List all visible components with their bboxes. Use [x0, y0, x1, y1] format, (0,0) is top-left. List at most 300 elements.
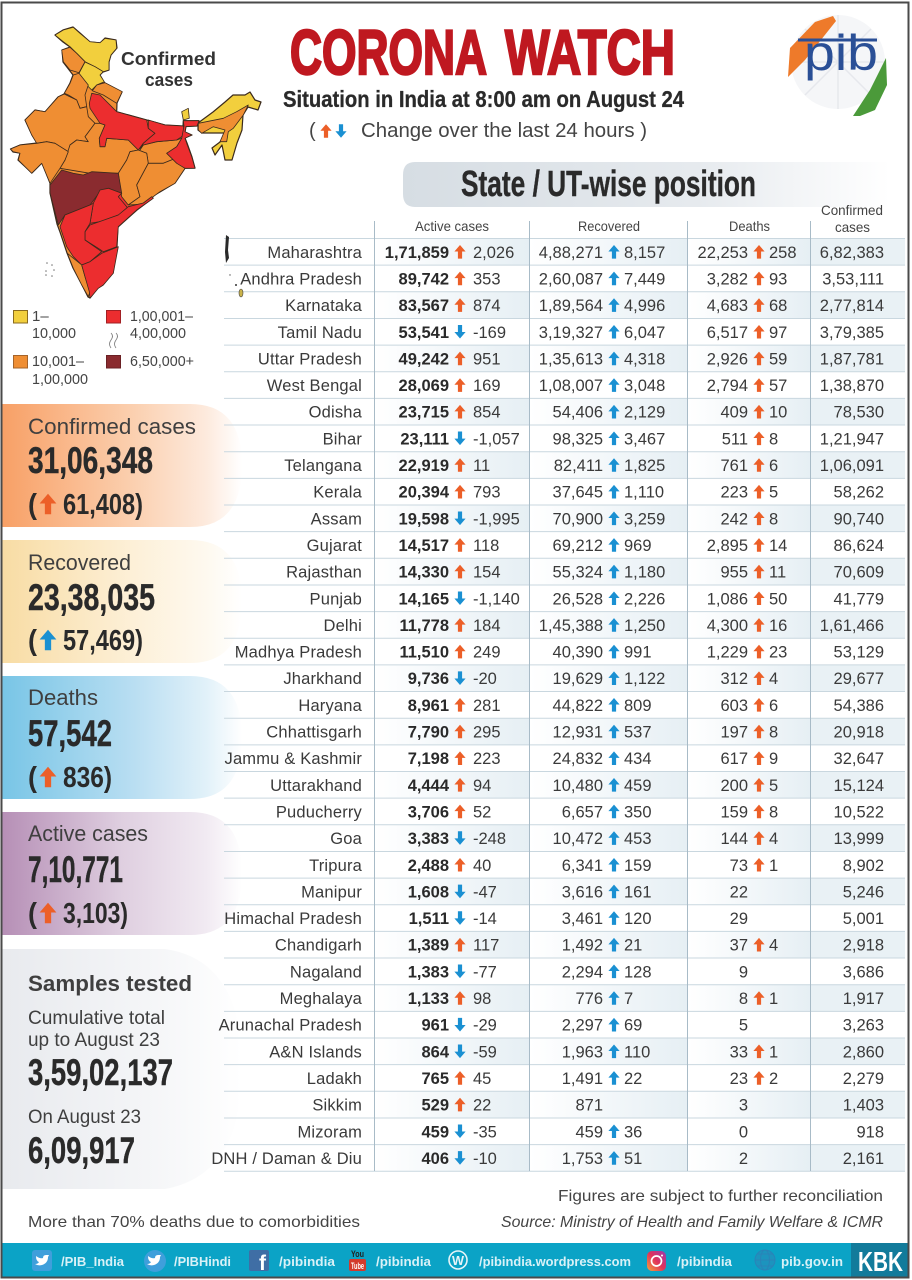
row: Jharkhand — [283, 665, 905, 692]
row: Puducherry — [276, 803, 884, 821]
map legend: 6,50,000+ — [130, 353, 194, 370]
row: Arunachal Pradesh: 3,263 — [843, 1017, 884, 1035]
row: West Bengal: West Bengal — [267, 377, 362, 395]
row: Tamil Nadu: 53,541 — [399, 324, 449, 342]
row: Ladakh: Ladakh — [307, 1070, 362, 1088]
row: Punjab — [310, 590, 884, 608]
row: Tamil Nadu: 97 — [769, 324, 787, 342]
row: Mizoram: -35 — [473, 1123, 497, 1141]
map legend: 1,00,000 — [32, 371, 88, 388]
row: A&N Islands: 1,963 — [562, 1043, 603, 1061]
row: Puducherry: 159 — [720, 803, 748, 821]
row: Chandigarh: 2,918 — [843, 937, 884, 955]
row: Andhra Pradesh: Andhra Pradesh — [240, 270, 362, 288]
row: Jharkhand: 1,122 — [624, 670, 665, 688]
row: Punjab: 14,165 — [399, 590, 449, 608]
footer text: pibindia: /pibindia — [279, 1254, 336, 1269]
map: Andaman and Nicobar islands — [225, 235, 243, 297]
row: Uttarakhand: 200 — [720, 777, 748, 795]
row: Odisha: 854 — [473, 404, 501, 422]
row: Sikkim: 3 — [739, 1097, 748, 1115]
row: Punjab: Punjab — [310, 590, 362, 608]
row: Odisha: 54,406 — [553, 404, 603, 422]
row: Uttar Pradesh: Uttar Pradesh — [258, 350, 362, 368]
row: Haryana — [298, 697, 884, 715]
row: Telangana: 1,825 — [624, 457, 665, 475]
map legend: 4,00,000 — [130, 325, 186, 342]
row: Gujarat: 969 — [624, 537, 652, 555]
row: Chhattisgarh: 7,790 — [408, 724, 449, 742]
row: Madhya Pradesh: 40,390 — [553, 644, 603, 662]
row: Punjab: 50 — [769, 590, 787, 608]
row: Ladakh: 22 — [624, 1070, 642, 1088]
row: DNH / Daman & Diu: 51 — [624, 1150, 642, 1168]
row: Punjab: 26,528 — [553, 590, 603, 608]
row: Meghalaya: 98 — [473, 990, 491, 1008]
row: Jharkhand: Jharkhand — [283, 670, 362, 688]
panel: active cases: 3,103) — [63, 898, 128, 930]
row: Delhi: 11,778 — [399, 617, 449, 635]
map legend — [14, 308, 194, 388]
row: Bihar: 23,111 — [400, 430, 449, 448]
row: Chandigarh: 1,492 — [562, 937, 603, 955]
row: Mizoram: Mizoram — [297, 1123, 362, 1141]
row: Goa: Goa — [330, 830, 363, 848]
map label — [121, 49, 216, 90]
subtitle: Situation in India at 8:00 am on August 24 — [283, 86, 684, 112]
table header: cases — [835, 219, 870, 235]
row: West Bengal: 1,38,870 — [820, 377, 884, 395]
row: Puducherry: Puducherry — [276, 803, 363, 821]
row: Mizoram — [297, 1123, 884, 1141]
logo: PIB — [788, 15, 887, 116]
row: Telangana: Telangana — [284, 457, 363, 475]
map legend: 10,001– — [32, 353, 85, 370]
row: Jharkhand: 9,736 — [408, 670, 449, 688]
row: Sikkim: Sikkim — [312, 1097, 362, 1115]
row: Sikkim: 871 — [575, 1097, 603, 1115]
row: Delhi: Delhi — [323, 617, 362, 635]
row: Nagaland: 2,294 — [562, 963, 603, 981]
row: A&N Islands: -59 — [473, 1043, 497, 1061]
row: Sikkim: 22 — [473, 1097, 491, 1115]
footer bar — [2, 1243, 908, 1277]
panel: active cases: Active cases — [28, 821, 148, 846]
row: Telangana: 11 — [473, 457, 490, 475]
row: Assam — [311, 505, 905, 532]
row: Haryana: 809 — [624, 697, 652, 715]
panel: recovered: 23,38,035 — [28, 577, 155, 618]
row: Bihar: 1,21,947 — [820, 430, 884, 448]
note: comorbidities: More than 70% deaths due to comorbidities — [28, 1214, 360, 1231]
row: Tripura: 2,488 — [408, 857, 449, 875]
heading: State / UT-wise position: State / UT-wise position — [461, 163, 756, 204]
row: Rajasthan: 955 — [720, 564, 748, 582]
map label: cases — [145, 70, 193, 90]
row: Himachal Pradesh: 29 — [730, 910, 748, 928]
row: Meghalaya: 8 — [739, 990, 748, 1008]
row: Gujarat: 69,212 — [553, 537, 603, 555]
row: DNH / Daman & Diu: -10 — [473, 1150, 497, 1168]
icon: twitter square — [32, 1250, 52, 1271]
row: Goa: 3,383 — [408, 830, 449, 848]
icon: youtube: You — [351, 1249, 364, 1259]
row: Himachal Pradesh: 3,461 — [562, 910, 603, 928]
row: Chhattisgarh: Chhattisgarh — [266, 724, 362, 742]
row: West Bengal: 169 — [473, 377, 501, 395]
footer text: website: pib.gov.in — [781, 1254, 843, 1269]
row: Karnataka: 4,683 — [707, 297, 748, 315]
title: CORONA — [290, 18, 487, 88]
row: Madhya Pradesh: 23 — [769, 644, 787, 662]
row: Jammu & Kashmir: Jammu & Kashmir — [225, 750, 362, 768]
row: Arunachal Pradesh: Arunachal Pradesh — [219, 1017, 362, 1035]
row: Tripura: 1 — [769, 857, 778, 875]
row: West Bengal: 2,794 — [707, 377, 748, 395]
row: Mizoram: 0 — [739, 1123, 748, 1141]
row: Manipur: 161 — [624, 883, 652, 901]
row: Chhattisgarh: 197 — [720, 724, 748, 742]
row: Gujarat: 86,624 — [834, 537, 884, 555]
row: Haryana: 6 — [769, 697, 778, 715]
row: Goa — [330, 825, 905, 851]
panel: samples tested — [2, 949, 242, 1189]
row: Chhattisgarh — [266, 718, 905, 745]
row: Telangana — [284, 452, 905, 478]
row: Rajasthan: 11 — [769, 564, 786, 582]
row: Manipur: 3,616 — [562, 883, 603, 901]
row: Arunachal Pradesh: 961 — [421, 1017, 449, 1035]
table — [211, 202, 905, 1171]
row: Assam: 70,900 — [553, 510, 603, 528]
row: Delhi: 4,300 — [707, 617, 748, 635]
row: Ladakh: 2 — [769, 1070, 778, 1088]
row: Delhi — [323, 612, 905, 638]
row: West Bengal: 3,048 — [624, 377, 665, 395]
row: Odisha: 409 — [720, 404, 748, 422]
row: Chhattisgarh: 295 — [473, 724, 501, 742]
row: Chandigarh: 37 — [730, 937, 748, 955]
row: Haryana: 281 — [473, 697, 501, 715]
row: Kerala: 793 — [473, 484, 501, 502]
row: Manipur: Manipur — [301, 883, 362, 901]
row: DNH / Daman & Diu: 2,161 — [843, 1150, 884, 1168]
panel: recovered — [2, 540, 242, 663]
row: Karnataka: 1,89,564 — [539, 297, 603, 315]
footer text: PIB_India: /PIB_India — [61, 1254, 125, 1269]
row: Jammu & Kashmir: 7,198 — [408, 750, 449, 768]
row: Odisha: 10 — [769, 404, 787, 422]
row: Manipur: -47 — [473, 883, 497, 901]
row: Punjab: 41,779 — [834, 590, 884, 608]
row: Tripura: Tripura — [309, 857, 363, 875]
row: Uttarakhand: 5 — [769, 777, 778, 795]
map label: Confirmed — [121, 49, 216, 69]
row: Bihar: 511 — [722, 430, 748, 448]
row: Punjab: -1,140 — [473, 590, 520, 608]
row: Haryana: Haryana — [298, 697, 363, 715]
row: Chandigarh: Chandigarh — [275, 937, 362, 955]
row: Assam: Assam — [311, 510, 362, 528]
icon: facebook: f — [259, 1252, 267, 1275]
row: Meghalaya: 776 — [575, 990, 603, 1008]
row: Jammu & Kashmir: 434 — [624, 750, 652, 768]
row: Gujarat: 2,895 — [707, 537, 748, 555]
row: Telangana: 6 — [769, 457, 778, 475]
row: Haryana: 603 — [720, 697, 748, 715]
row: Delhi: 184 — [473, 617, 501, 635]
panel: deaths: 836) — [63, 762, 112, 794]
row: Kerala: 37,645 — [553, 484, 603, 502]
row: Maharashtra: 4,88,271 — [539, 244, 603, 262]
row: Tripura: 73 — [730, 857, 748, 875]
row: Sikkim: 1,403 — [843, 1097, 884, 1115]
row: Uttar Pradesh — [258, 345, 905, 372]
row: Uttar Pradesh: 951 — [473, 350, 501, 368]
row: Uttar Pradesh: 1,87,781 — [820, 350, 884, 368]
panel: deaths: 57,542 — [28, 713, 112, 754]
row: Assam: 90,740 — [834, 510, 884, 528]
panel: deaths: ( — [28, 762, 37, 794]
title: WATCH — [505, 18, 675, 88]
row: A&N Islands: 1 — [769, 1043, 778, 1061]
row: Ladakh: 1,491 — [562, 1070, 603, 1088]
footer text: wordpress: /pibindia.wordpress.com — [479, 1254, 631, 1269]
row: Jammu & Kashmir — [225, 750, 884, 768]
row: Nagaland: -77 — [473, 963, 497, 981]
row: Karnataka — [285, 292, 905, 318]
row: DNH / Daman & Diu: 1,753 — [562, 1150, 603, 1168]
row: Bihar: 98,325 — [553, 430, 603, 448]
row: Puducherry: 6,657 — [562, 803, 603, 821]
row: Goa: 144 — [720, 830, 748, 848]
row: Chandigarh: 117 — [473, 937, 499, 955]
row: Uttarakhand: 94 — [473, 777, 491, 795]
row: Tripura — [309, 857, 884, 875]
row: Kerala: 58,262 — [834, 484, 884, 502]
row: Gujarat: 14,517 — [399, 537, 449, 555]
note: reconciliation: Figures are subject to further reconciliation — [558, 1188, 883, 1205]
row: Haryana: 54,386 — [834, 697, 884, 715]
row: Telangana: 1,06,091 — [820, 457, 884, 475]
row: Himachal Pradesh: Himachal Pradesh — [224, 910, 362, 928]
row: Uttarakhand — [270, 772, 905, 798]
row: Ladakh: 23 — [730, 1070, 748, 1088]
row: Madhya Pradesh: 11,510 — [399, 644, 449, 662]
map legend: 10,000 — [32, 325, 76, 342]
change over 24 hours key: Change over the last 24 hours ) — [361, 120, 647, 142]
row: Chandigarh — [275, 931, 905, 958]
row: Kerala: Kerala — [313, 484, 363, 502]
row: A&N Islands: 2,860 — [843, 1043, 884, 1061]
row: Goa: 453 — [624, 830, 652, 848]
row: Meghalaya: 7 — [624, 990, 633, 1008]
row: Odisha: Odisha — [309, 404, 363, 422]
row: Ladakh: 2,279 — [843, 1070, 884, 1088]
row: Uttarakhand: 15,124 — [834, 777, 884, 795]
row: Assam: 3,259 — [624, 510, 665, 528]
row: Punjab: 1,086 — [707, 590, 748, 608]
row: A&N Islands: 33 — [730, 1043, 748, 1061]
row: Bihar: 8 — [769, 430, 778, 448]
row: Himachal Pradesh: -14 — [473, 910, 497, 928]
row: Mizoram: 459 — [421, 1123, 449, 1141]
row: Odisha: 2,129 — [624, 404, 665, 422]
row: Bihar: -1,057 — [473, 430, 520, 448]
panel: confirmed cases: 61,408) — [63, 489, 143, 521]
row: Ladakh: 765 — [421, 1070, 449, 1088]
row: West Bengal: 57 — [769, 377, 787, 395]
row: Delhi: 16 — [769, 617, 787, 635]
map legend: 1,00,001– — [130, 308, 194, 325]
row: Delhi: 1,45,388 — [539, 617, 603, 635]
row: Andhra Pradesh: 353 — [473, 270, 501, 288]
row: Rajasthan: 1,180 — [624, 564, 665, 582]
row: Andhra Pradesh: 3,53,111 — [822, 270, 884, 288]
row: Manipur: 22 — [730, 883, 748, 901]
panel: samples tested: On August 23 — [28, 1107, 141, 1128]
row: Rajasthan: 70,609 — [834, 564, 884, 582]
row: Telangana: 82,411 — [554, 457, 603, 475]
icon: wordpress — [449, 1251, 467, 1269]
table header: Confirmed — [821, 202, 883, 218]
row: Madhya Pradesh: Madhya Pradesh — [235, 644, 362, 662]
row: Himachal Pradesh: 1,511 — [409, 910, 449, 928]
row: Andhra Pradesh: 89,742 — [399, 270, 449, 288]
row: Tamil Nadu: 6,517 — [707, 324, 748, 342]
row: Chhattisgarh: 8 — [769, 724, 778, 742]
row: Nagaland: 1,383 — [408, 963, 449, 981]
row: A&N Islands: A&N Islands — [269, 1043, 362, 1061]
row: Telangana: 22,919 — [399, 457, 449, 475]
panel: samples tested: Samples tested — [28, 971, 192, 996]
panel: confirmed cases — [2, 404, 242, 527]
row: Manipur: 5,246 — [843, 883, 884, 901]
row: Chhattisgarh: 537 — [624, 724, 652, 742]
row: Uttarakhand: 459 — [624, 777, 652, 795]
row: Gujarat: Gujarat — [307, 537, 362, 555]
panel: confirmed cases: Confirmed cases — [28, 414, 196, 439]
map of India — [10, 27, 261, 298]
row: Tamil Nadu: 3,19,327 — [539, 324, 603, 342]
row: Uttar Pradesh: 1,35,613 — [539, 350, 603, 368]
map legend: 1– — [32, 308, 49, 325]
row: Madhya Pradesh: 249 — [473, 644, 501, 662]
row: Goa: 4 — [769, 830, 778, 848]
row: Manipur — [301, 878, 905, 905]
row: Meghalaya: 1,917 — [843, 990, 884, 1008]
row: Goa: -248 — [473, 830, 506, 848]
row: Karnataka: Karnataka — [285, 297, 363, 315]
row: Andhra Pradesh: 7,449 — [624, 270, 665, 288]
row: Maharashtra: Maharashtra — [267, 244, 363, 262]
row: Rajasthan: 154 — [473, 564, 501, 582]
row: Jharkhand: 19,629 — [553, 670, 603, 688]
icon: youtube: Tube — [351, 1261, 364, 1271]
table header: Deaths — [729, 218, 770, 234]
row: Puducherry: 350 — [624, 803, 652, 821]
row: A&N Islands — [269, 1038, 905, 1065]
row: Meghalaya: 1 — [769, 990, 778, 1008]
panel: active cases: 7,10,771 — [28, 849, 123, 890]
row: Kerala — [313, 484, 884, 502]
row: West Bengal — [267, 377, 884, 395]
row: Chandigarh: 21 — [624, 937, 642, 955]
row: Assam: 19,598 — [399, 510, 449, 528]
row: A&N Islands: 110 — [624, 1043, 650, 1061]
panel: samples tested: 3,59,02,137 — [28, 1052, 173, 1093]
row: Madhya Pradesh: 53,129 — [834, 644, 884, 662]
row: Tripura: 159 — [624, 857, 652, 875]
row: Nagaland: Nagaland — [290, 963, 362, 981]
row: Kerala: 1,110 — [624, 484, 664, 502]
row: Andhra Pradesh: 3,282 — [707, 270, 748, 288]
change over 24 hours key: ( — [309, 120, 316, 142]
row: Tamil Nadu: Tamil Nadu — [278, 324, 362, 342]
panel: recovered: Recovered — [28, 550, 131, 575]
row: Goa: 10,472 — [553, 830, 603, 848]
row: Sikkim — [312, 1091, 905, 1118]
row: Assam: 242 — [720, 510, 748, 528]
row: Bihar — [323, 430, 884, 448]
table header: Active cases — [415, 218, 489, 234]
row: Tripura: 40 — [473, 857, 491, 875]
row: Puducherry: 8 — [769, 803, 778, 821]
row: Haryana: 8,961 — [408, 697, 449, 715]
panel: active cases — [2, 812, 242, 935]
row: Jammu & Kashmir: 24,832 — [553, 750, 603, 768]
footer text: PIBHindi: /PIBHindi — [174, 1254, 231, 1269]
row: Sikkim: 529 — [421, 1097, 449, 1115]
row: DNH / Daman & Diu: 2 — [739, 1150, 748, 1168]
row: Madhya Pradesh: 991 — [624, 644, 652, 662]
row: Maharashtra: 1,71,859 — [385, 244, 449, 262]
row: Ladakh: 45 — [473, 1070, 491, 1088]
row: Tamil Nadu — [278, 324, 884, 342]
row: Kerala: 223 — [720, 484, 748, 502]
row: Mizoram: 36 — [624, 1123, 642, 1141]
row: Puducherry: 3,706 — [408, 803, 449, 821]
row: Arunachal Pradesh: 5 — [739, 1017, 748, 1035]
row: Uttar Pradesh: 59 — [769, 350, 787, 368]
row: Karnataka: 83,567 — [399, 297, 449, 315]
panel: samples tested: 6,09,917 — [28, 1130, 135, 1171]
row: Manipur: 1,608 — [408, 883, 449, 901]
panel: samples tested: Cumulative total — [28, 1008, 165, 1029]
row: Mizoram: 918 — [856, 1123, 884, 1141]
row: Himachal Pradesh: 120 — [624, 910, 652, 928]
row: Chandigarh: 4 — [769, 937, 778, 955]
row: Meghalaya — [280, 985, 905, 1011]
row: Jharkhand: 29,677 — [834, 670, 884, 688]
row: Arunachal Pradesh: 2,297 — [562, 1017, 603, 1035]
panel: confirmed cases: 31,06,348 — [28, 440, 153, 481]
row: Uttar Pradesh: 2,926 — [707, 350, 748, 368]
row: Chhattisgarh: 20,918 — [834, 724, 884, 742]
footer text: pibindia youtube: /pibindia — [376, 1254, 432, 1269]
row: Karnataka: 4,996 — [624, 297, 665, 315]
row: Haryana: 44,822 — [553, 697, 603, 715]
row: Andhra Pradesh: 2,60,087 — [539, 270, 603, 288]
row: Meghalaya: 1,133 — [408, 990, 449, 1008]
row: DNH / Daman & Diu: 406 — [421, 1150, 449, 1168]
row: Rajasthan: 14,330 — [399, 564, 449, 582]
row: Puducherry: 52 — [473, 803, 491, 821]
row: Jharkhand: 312 — [720, 670, 748, 688]
row: Chandigarh: 1,389 — [408, 937, 449, 955]
table header: Recovered — [578, 218, 640, 234]
row: Arunachal Pradesh: 69 — [624, 1017, 642, 1035]
